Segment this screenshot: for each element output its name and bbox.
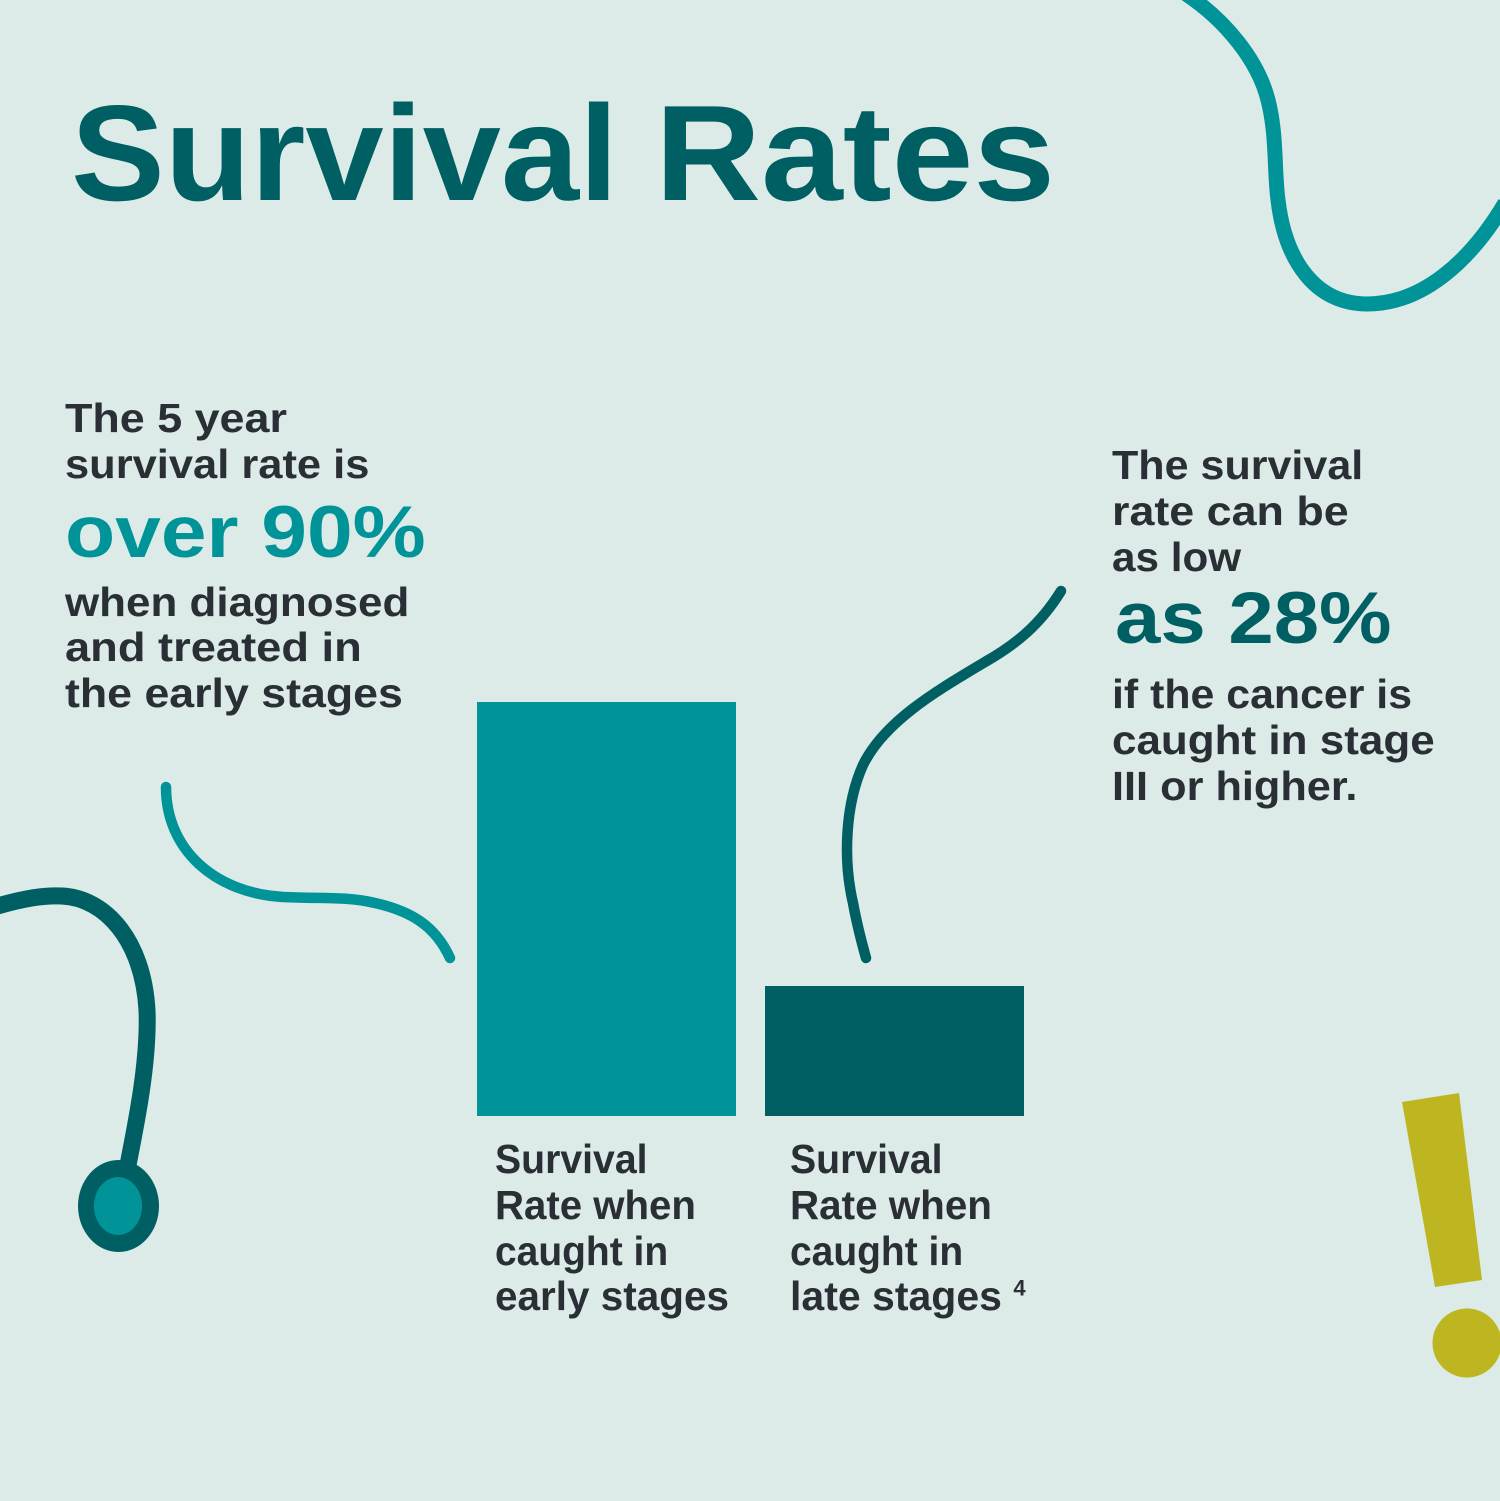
label: late stages: Survival bbox=[790, 1136, 943, 1182]
label: early stages: Survival bbox=[495, 1136, 648, 1182]
text block: late stage survival: rate can be bbox=[1112, 488, 1349, 534]
text block: late stage survival: if the cancer is bbox=[1112, 671, 1412, 717]
label: late stages: caught in bbox=[790, 1228, 963, 1274]
text block: early stage survival: when diagnosed bbox=[65, 579, 409, 625]
stat: over 90%: over 90% bbox=[65, 492, 426, 573]
label: early stages: Rate when bbox=[495, 1182, 696, 1228]
bar: late stages bbox=[765, 986, 1024, 1116]
bar: early stages bbox=[477, 702, 736, 1116]
text block: late stage survival bbox=[1112, 442, 1435, 809]
text block: early stage survival bbox=[64, 395, 426, 716]
text block: early stage survival: survival rate is bbox=[65, 441, 369, 487]
stat: as 28%: as 28% bbox=[1115, 578, 1392, 659]
label: late stages: Rate when bbox=[790, 1182, 992, 1228]
text block: late stage survival: III or higher. bbox=[1112, 763, 1357, 809]
label: early stages: caught in bbox=[495, 1228, 668, 1274]
text block: late stage survival: as low bbox=[1112, 534, 1241, 580]
title: Rates bbox=[655, 77, 1055, 229]
text block: late stage survival: The survival bbox=[1112, 442, 1363, 488]
title bbox=[71, 77, 1055, 229]
title: Survival bbox=[71, 77, 618, 229]
text block: early stage survival: and treated in bbox=[65, 624, 362, 670]
label: early stages: early stages bbox=[495, 1273, 729, 1319]
text block: late stage survival: caught in stage bbox=[1112, 717, 1435, 763]
label: late stages: late stages 4 bbox=[790, 1273, 1026, 1319]
text block: early stage survival: the early stages bbox=[65, 670, 403, 716]
label: early stages bbox=[495, 1136, 729, 1319]
label: late stages bbox=[790, 1136, 1026, 1319]
text block: early stage survival: The 5 year bbox=[65, 395, 287, 441]
